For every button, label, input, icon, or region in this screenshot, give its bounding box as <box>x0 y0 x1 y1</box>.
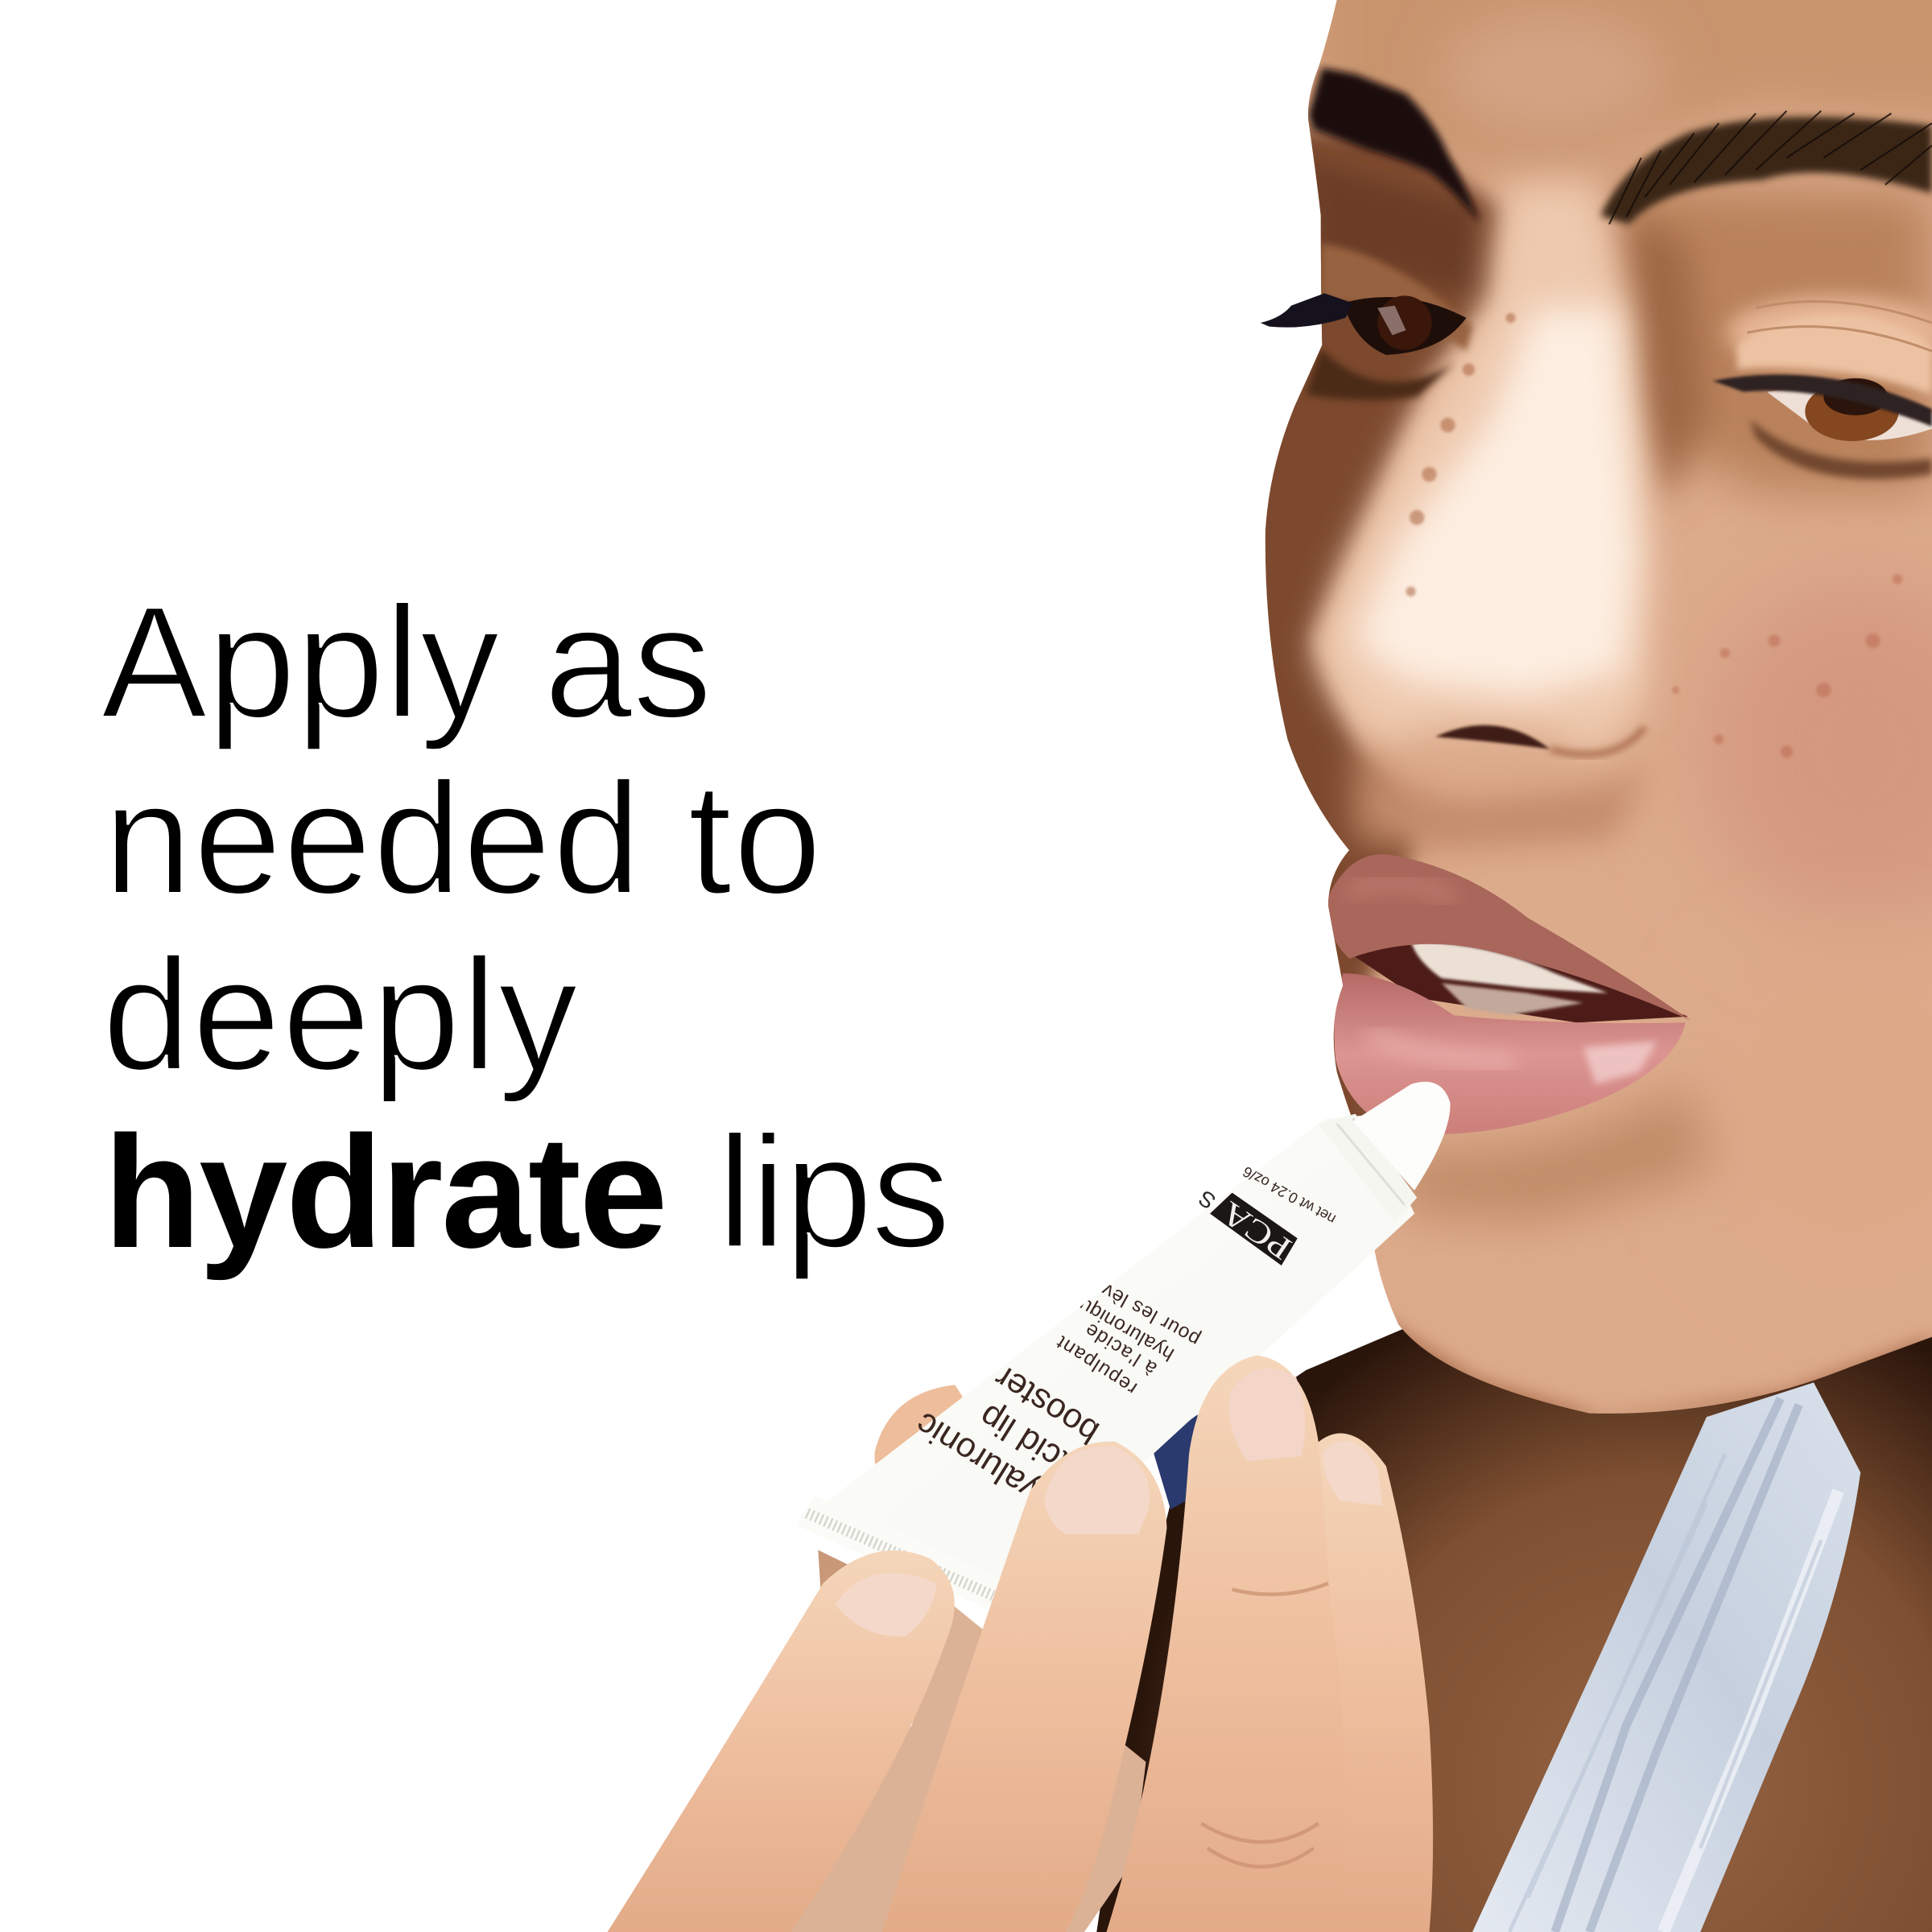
tube body <box>796 1115 1414 1608</box>
middle finger <box>882 1442 1166 1932</box>
product name: booster <box>988 1358 1106 1451</box>
left eyebrow <box>1309 68 1480 223</box>
headline: hydrate <box>104 1103 668 1281</box>
shadow under lower lip and jaw <box>1393 1084 1713 1220</box>
nose bridge soft light <box>1316 185 1651 754</box>
logo <box>1194 1186 1298 1266</box>
finger behind tube <box>874 1385 992 1516</box>
upper lip <box>1326 854 1690 1020</box>
knuckle below crimp <box>818 1550 869 1589</box>
crimped end <box>796 1496 1004 1608</box>
fingers <box>608 1356 1433 1932</box>
headline: Apply as <box>101 573 712 751</box>
net weight: net wt 0.24 oz/6 <box>1240 1163 1339 1228</box>
lower lip <box>1334 973 1686 1134</box>
palm between fingers <box>764 1602 1146 1932</box>
face <box>1232 0 1932 1479</box>
headline: needed to <box>104 749 822 927</box>
shaded left cheek and temple <box>1265 118 1509 1116</box>
French description <box>1053 1265 1203 1399</box>
thumb <box>608 1550 955 1932</box>
shirt <box>1472 1382 1860 1932</box>
blue cap behind tube <box>1152 1414 1198 1509</box>
right eyebrow <box>1600 111 1932 225</box>
headline <box>101 573 949 1281</box>
French description: hyaluronique <box>1066 1288 1178 1365</box>
product name: acid lip <box>972 1397 1084 1486</box>
under-eye socket shadow <box>1608 185 1932 493</box>
teeth <box>1411 941 1608 1015</box>
neck <box>1096 1319 1932 1932</box>
left eye <box>1343 295 1466 355</box>
little finger <box>1306 1434 1433 1932</box>
nostril and nose crease <box>1356 725 1651 850</box>
left eye lashes <box>1261 293 1353 328</box>
nozzle <box>1353 1082 1451 1191</box>
right cheek <box>1700 579 1932 924</box>
logo: PCA <box>1215 1195 1298 1266</box>
cheek blemishes <box>1672 574 1902 758</box>
French description: à l'acide <box>1081 1319 1161 1380</box>
headline: lips <box>717 1103 949 1281</box>
forehead <box>1306 0 1932 172</box>
product name: hyaluronic <box>909 1405 1063 1521</box>
mouth interior <box>1343 936 1688 1022</box>
headline: deeply <box>102 926 578 1104</box>
left eyelid <box>1306 244 1472 400</box>
right eye <box>1713 301 1932 479</box>
ring finger <box>1106 1356 1345 1932</box>
neck of tube <box>1319 1114 1417 1222</box>
product name <box>909 1335 1106 1521</box>
logo: S <box>1194 1186 1220 1214</box>
freckles on nose <box>1406 313 1516 597</box>
product tube <box>796 1082 1451 1608</box>
French description: repulpant <box>1053 1331 1141 1399</box>
nose highlight <box>1356 308 1637 696</box>
French description: pour les lèvres <box>1072 1265 1203 1351</box>
